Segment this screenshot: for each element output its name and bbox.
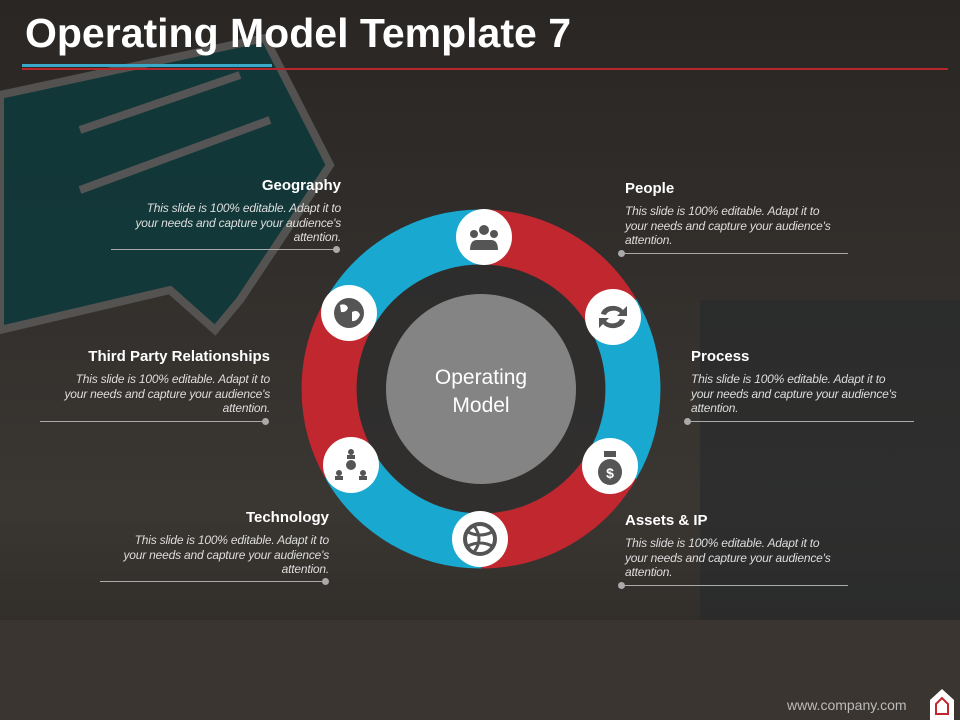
title: Operating Model Template 7 [25, 10, 571, 56]
icon: money bag: $ [606, 465, 614, 481]
title underline [22, 64, 948, 70]
block: third party relationships: Third Party Relationships [88, 348, 270, 365]
block: process: This slide is 100% editable. Adapt it to [691, 372, 885, 386]
block: assets & ip: This slide is 100% editable. Adapt it to [625, 536, 819, 550]
block: technology: Technology [246, 509, 329, 526]
block: people: your needs and capture your audience's [625, 218, 830, 232]
block: geography: your needs and capture your audience's [136, 216, 341, 230]
block: assets & ip: your needs and capture your audience's [625, 550, 830, 564]
block: assets & ip: attention. [625, 565, 672, 579]
block: people [618, 180, 848, 257]
icon: money bag [582, 438, 638, 494]
block: people: attention. [625, 233, 672, 247]
icon: process [585, 289, 641, 345]
block: third party relationships: attention. [223, 401, 270, 415]
block: technology: This slide is 100% editable. Adapt it to [135, 533, 329, 547]
block: technology [100, 509, 329, 585]
block: third party relationships: This slide is 100% editable. Adapt it to [76, 372, 270, 386]
block: technology: attention. [282, 562, 329, 576]
block: assets & ip [618, 512, 848, 589]
block: geography [111, 177, 341, 253]
block: assets & ip: Assets & IP [625, 512, 708, 529]
center label: Operating [435, 366, 527, 389]
ring diagram: Model [452, 394, 510, 417]
block: technology: your needs and capture your audience's [124, 548, 329, 562]
icon: network globe [452, 511, 508, 567]
icon: home [930, 689, 954, 720]
block: third party relationships [40, 348, 270, 425]
block: process [684, 348, 914, 425]
block: geography: attention. [294, 230, 341, 244]
block: geography: Geography [262, 177, 341, 194]
block: process: attention. [691, 401, 738, 415]
block: people: People [625, 180, 674, 197]
block: third party relationships: your needs and capture your audience's [64, 386, 270, 400]
icon: globe [321, 285, 377, 341]
segments [329, 237, 633, 541]
icon: people [456, 209, 512, 265]
icon: technology [323, 437, 379, 493]
block: geography: This slide is 100% editable. Adapt it to [147, 201, 341, 215]
block: process: your needs and capture your audience's [691, 386, 896, 400]
footer url: www.company.com [787, 697, 907, 713]
block: process: Process [691, 348, 749, 365]
block: people: This slide is 100% editable. Adapt it to [625, 204, 819, 218]
